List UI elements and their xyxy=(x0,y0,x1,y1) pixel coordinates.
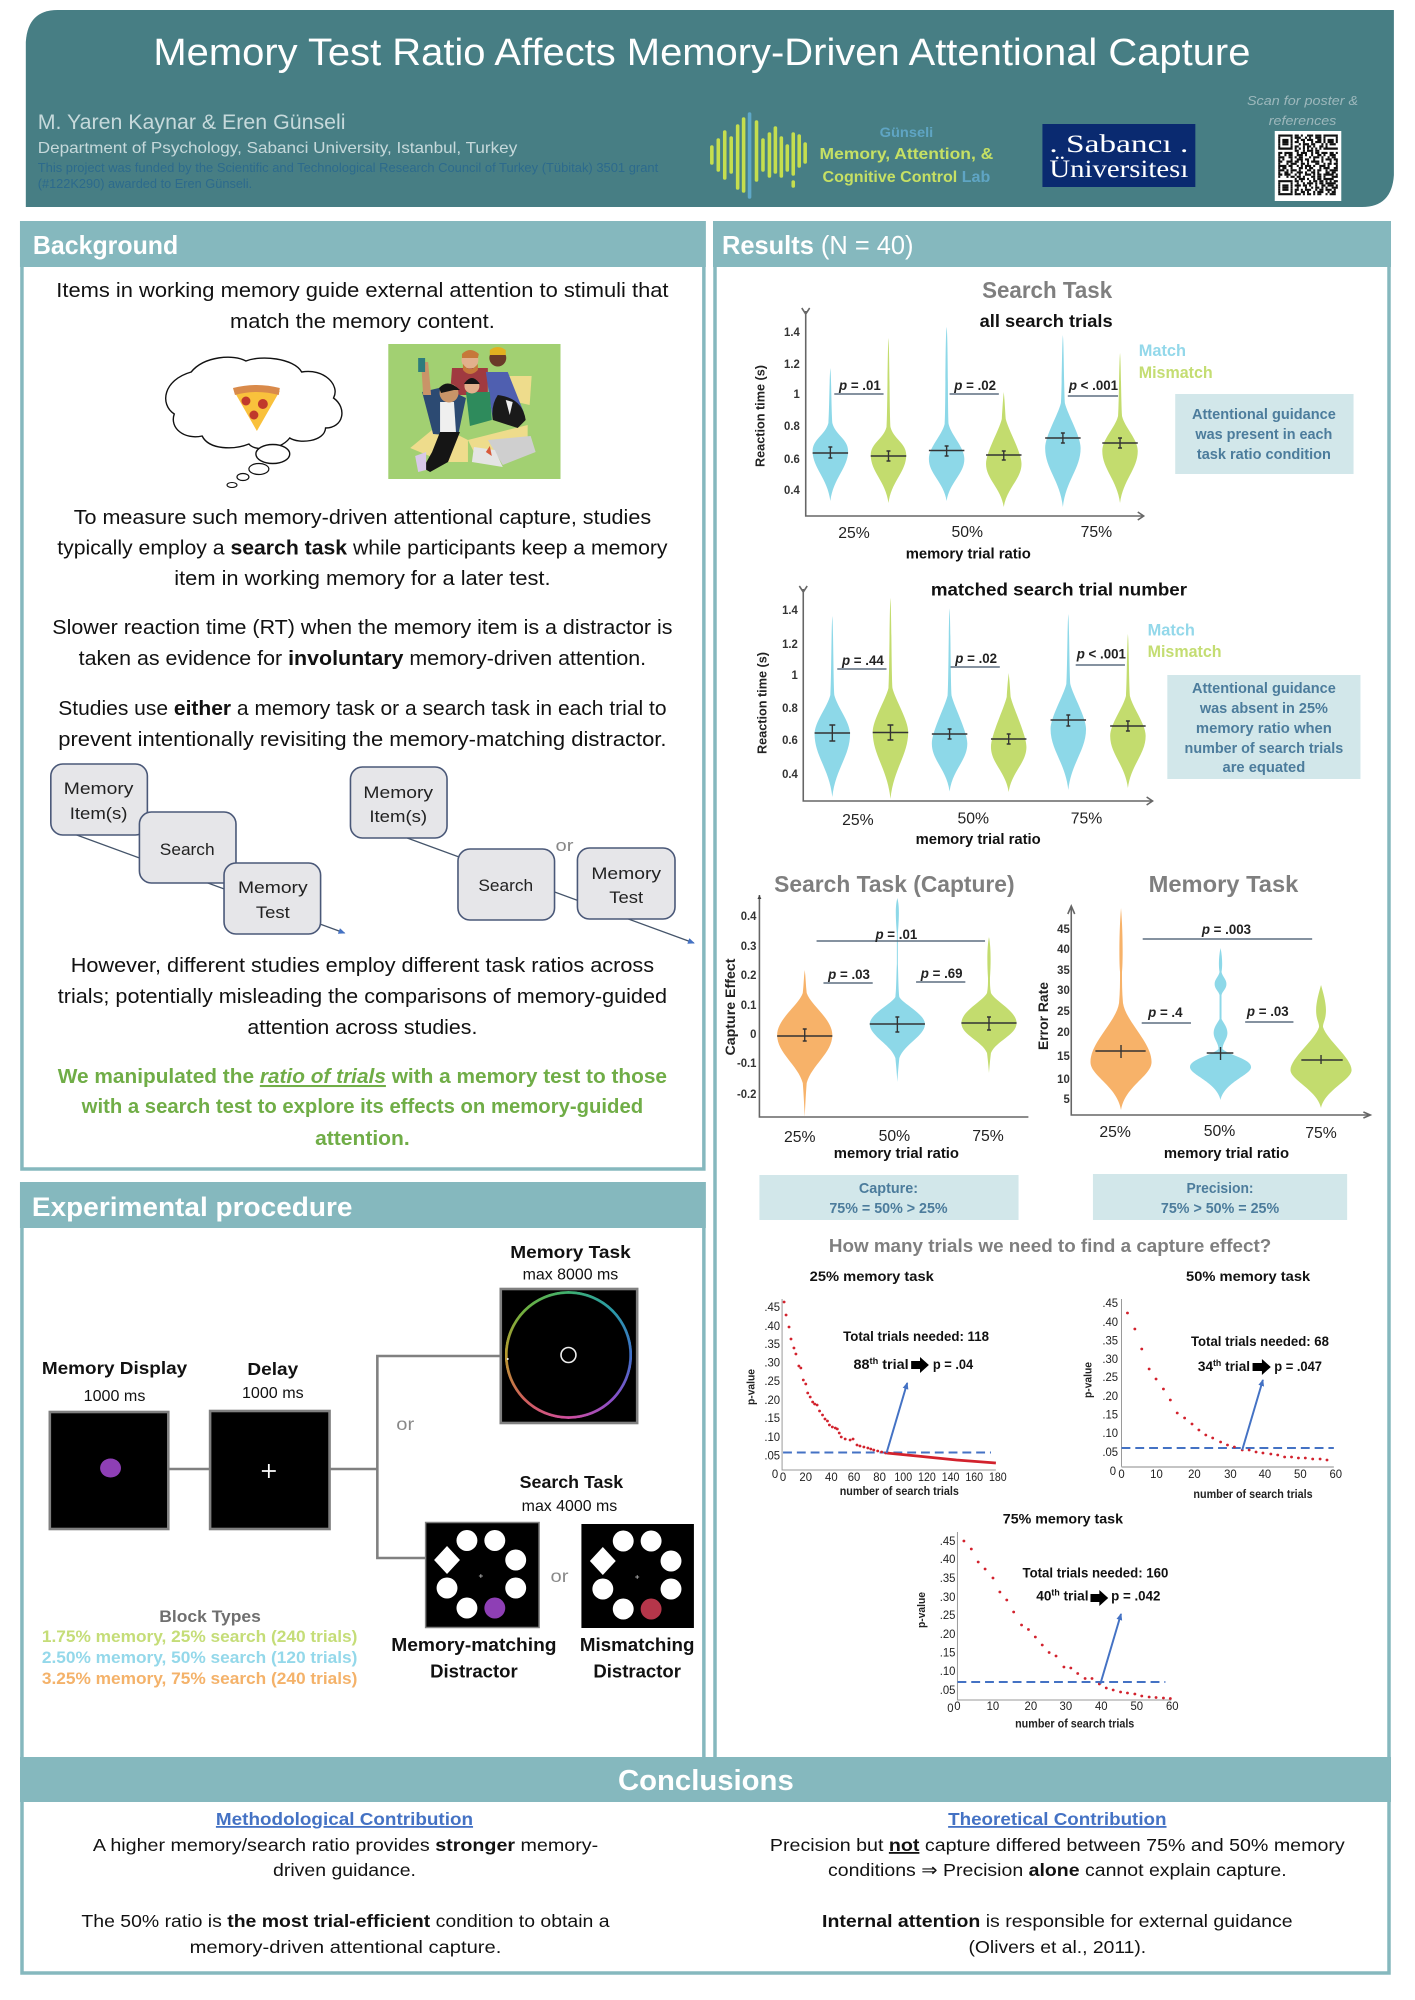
chart: capture effect violin plot: memory trial ratio xyxy=(834,1146,959,1162)
chart: memory error rate violin plot: p = .03 xyxy=(1246,1004,1289,1019)
chart: 25% memory task p-value curve: 60 xyxy=(848,1472,860,1484)
connector lines xyxy=(168,1356,500,1558)
chart: 75% memory task p-value curve: .20 xyxy=(940,1629,955,1641)
chart: capture effect violin plot: -0.1 xyxy=(737,1058,757,1070)
legend: match and mismatch xyxy=(1139,341,1213,382)
chart: 50% memory task p-value curve: 0 xyxy=(1118,1469,1125,1481)
chart: memory error rate violin plot: 15 xyxy=(1057,1051,1070,1063)
callout: guidance present: Attentional guidance xyxy=(1192,407,1336,423)
chart: 50% memory task p-value curve: .15 xyxy=(1102,1409,1118,1422)
diagram: sequential trial flow: Search xyxy=(160,840,215,859)
chart: 75% memory task p-value curve: 60 xyxy=(1166,1701,1179,1713)
chart: 25% memory task p-value curve: 0 xyxy=(780,1472,786,1484)
chart: 25% memory task p-value curve: 100 xyxy=(894,1472,912,1484)
text block: task design: Studies use either a memory task or a search task in each trial to xyxy=(58,697,667,720)
callout: guidance absent xyxy=(1167,675,1360,779)
text block: theoretical contribution: Precision but not capture differed between 75% and 50% memory xyxy=(770,1835,1345,1855)
callout: guidance absent: was absent in 25% xyxy=(1199,701,1328,717)
chart: matched search trial number violin plot: 0.8 xyxy=(782,703,798,715)
legend: match and mismatch: Mismatch xyxy=(1139,363,1213,382)
chart: capture effect violin plot: -0.2 xyxy=(737,1089,756,1101)
diagram: sequential trial flow: Test xyxy=(256,903,290,922)
chart: capture effect violin plot: 25% xyxy=(784,1129,816,1146)
chart: all search trials violin plot: 1.2 xyxy=(784,359,800,371)
chart: 25% memory task p-value curve: .45 xyxy=(764,1302,780,1314)
panel: conclusions xyxy=(20,1757,1391,1973)
text block: methodological contribution: driven guidance. xyxy=(273,1860,416,1880)
chart: 25% memory task p-value curve: .05 xyxy=(764,1450,780,1463)
chart: matched search trial number violin plot: 0.4 xyxy=(782,769,798,781)
callout: precision summary: 75% > 50% = 25% xyxy=(1161,1201,1279,1217)
diagram: either-or trial flow: Memory xyxy=(363,783,434,802)
callout: guidance absent: Attentional guidance xyxy=(1192,681,1336,697)
chart: 25% memory task p-value curve: 20 xyxy=(799,1472,812,1484)
chart: 75% memory task p-value curve: .25 xyxy=(940,1610,955,1622)
text block: task ratios xyxy=(58,954,667,1039)
chart: 25% memory task p-value curve: th xyxy=(870,1356,878,1366)
chart: 50% memory task p-value curve: number of search trials xyxy=(1193,1489,1313,1501)
chart: 25% memory task p-value curve: .40 xyxy=(764,1321,780,1333)
chart: 25% memory task p-value curve: trial xyxy=(878,1356,909,1372)
chart: capture effect violin plot: Search Task (Capture) xyxy=(774,871,1015,897)
text block: task design: prevent intentionally revisiting the memory-matching distractor. xyxy=(58,728,667,751)
chart: memory error rate violin plot: 10 xyxy=(1057,1074,1070,1086)
chart: 25% memory task p-value curve: .20 xyxy=(764,1395,780,1407)
chart: 25% memory task p-value curve: 140 xyxy=(942,1472,959,1484)
chart: 25% memory task p-value curve: 120 xyxy=(918,1472,936,1484)
conclusions content xyxy=(81,1765,1345,1957)
authors: M. Yaren Kaynar & Eren Günseli xyxy=(38,111,345,134)
text block: measurement: item in working memory for a later test. xyxy=(174,567,551,590)
icon: colour wheel xyxy=(505,1291,632,1419)
chart: 75% memory task p-value curve: .15 xyxy=(940,1647,955,1660)
chart: 50% memory task p-value curve: trial xyxy=(1221,1358,1250,1374)
icon: QR code xyxy=(1275,131,1341,201)
chart: memory error rate violin plot: p = .003 xyxy=(1201,922,1251,937)
chart: all search trials violin plot: 1 xyxy=(794,389,800,401)
chart: 25% memory task p-value curve: Total trials needed: 118 xyxy=(843,1328,989,1344)
diagram: either-or trial flow xyxy=(350,767,694,943)
chart: capture effect violin plot: 75% xyxy=(972,1128,1004,1145)
chart: 75% memory task p-value curve: .30 xyxy=(940,1592,955,1604)
text block: theoretical contribution: conditions ⇒ Precision alone cannot explain capture. xyxy=(828,1860,1287,1880)
text block: intro: match the memory content. xyxy=(230,310,495,333)
chart: 25% memory task p-value curve: number of search trials xyxy=(840,1486,959,1498)
chart: 75% memory task p-value curve xyxy=(916,1510,1179,1731)
text block: task ratios: trials; potentially misleading the comparisons of memory-guided xyxy=(58,985,667,1008)
diagram: either-or trial flow: or xyxy=(556,836,574,855)
title: Memory Test Ratio Affects Memory-Driven Attentional Capture xyxy=(153,32,1250,74)
chart: 75% memory task p-value curve: 40 xyxy=(1036,1587,1052,1604)
callout: guidance absent: memory ratio when xyxy=(1196,721,1332,737)
text block: intro: Items in working memory guide external attention to stimuli that xyxy=(56,279,669,302)
chart: 50% memory task p-value curve: .30 xyxy=(1102,1354,1118,1366)
chart: 50% memory task p-value curve: .45 xyxy=(1102,1298,1118,1310)
chart: all search trials violin plot: Reaction time (s) xyxy=(752,365,767,467)
text block: aim of study: with a search test to explore its effects on memory-guided xyxy=(81,1095,643,1118)
chart: matched search trial number violin plot: 1.4 xyxy=(782,605,798,617)
image: picnic illustration xyxy=(388,344,561,479)
chart: matched search trial number violin plot: p = .02 xyxy=(954,651,997,666)
chart: matched search trial number violin plot: 25% xyxy=(842,812,874,829)
chart: 75% memory task p-value curve: p-value xyxy=(916,1592,928,1628)
chart: 50% memory task p-value curve: 0 xyxy=(1110,1466,1116,1478)
chart: 50% memory task p-value curve: .25 xyxy=(1102,1372,1118,1384)
chart: memory error rate violin plot: memory trial ratio xyxy=(1164,1146,1289,1162)
distractor labels: Distractor xyxy=(430,1660,518,1682)
chart: all search trials violin plot xyxy=(752,308,1144,563)
funding note xyxy=(38,161,659,191)
text block: reaction time xyxy=(52,616,673,670)
text block: theoretical contribution: Theoretical Contribution xyxy=(948,1809,1167,1829)
chart: 50% memory task p-value curve: .20 xyxy=(1102,1391,1118,1403)
chart: 25% memory task p-value curve: .15 xyxy=(764,1413,780,1425)
chart: 75% memory task p-value curve: 10 xyxy=(987,1701,999,1713)
chart: memory error rate violin plot: 25 xyxy=(1057,1006,1070,1018)
text block: methodological contribution xyxy=(81,1809,610,1957)
text block: task design xyxy=(58,697,667,751)
diagram: either-or trial flow: Item(s) xyxy=(369,807,427,826)
chart: 75% memory task p-value curve: .35 xyxy=(940,1573,955,1585)
lab name xyxy=(820,125,994,186)
chart: matched search trial number violin plot: memory trial ratio xyxy=(916,832,1041,848)
chart: capture effect violin plot: p = .01 xyxy=(874,927,918,942)
legend: match and mismatch: Match xyxy=(1139,341,1186,360)
chart: 25% memory task p-value curve xyxy=(746,1268,1007,1498)
text block: methodological contribution: memory-driven attentional capture. xyxy=(190,1937,501,1957)
chart: all search trials violin plot: p = .02 xyxy=(953,378,996,393)
chart: 25% memory task p-value curve: 0 xyxy=(772,1469,778,1481)
chart: 75% memory task p-value curve: .10 xyxy=(940,1666,955,1678)
chart: 50% memory task p-value curve: 30 xyxy=(1224,1469,1237,1481)
memory task: Memory Task xyxy=(510,1242,631,1262)
chart: 25% memory task p-value curve: .35 xyxy=(764,1339,780,1351)
chart: memory error rate violin plot xyxy=(1035,871,1370,1162)
chart: 50% memory task p-value curve: .05 xyxy=(1102,1447,1118,1459)
delay: 1000 ms xyxy=(242,1385,304,1402)
chart: matched search trial number violin plot: p = .44 xyxy=(841,653,884,668)
diagram: either-or trial flow: Search xyxy=(478,876,533,895)
chart: all search trials violin plot: all search trials xyxy=(980,311,1113,331)
chart: matched search trial number violin plot: matched search trial number xyxy=(931,579,1187,600)
callout: guidance present: was present in each xyxy=(1194,427,1332,443)
chart: all search trials violin plot: 0.8 xyxy=(784,421,800,433)
chart: 50% memory task p-value curve: 10 xyxy=(1150,1469,1163,1481)
scan note xyxy=(1247,93,1358,128)
chart: all search trials violin plot: 0.6 xyxy=(784,454,800,466)
chart: matched search trial number violin plot: 0.6 xyxy=(782,735,798,747)
chart: 75% memory task p-value curve: trial xyxy=(1060,1587,1089,1604)
scan note: Scan for poster & xyxy=(1247,93,1358,108)
chart: 50% memory task p-value curve xyxy=(1083,1268,1342,1501)
chart: 50% memory task p-value curve: 40 xyxy=(1259,1469,1271,1481)
chart: memory error rate violin plot: Error Rate xyxy=(1035,982,1051,1050)
chart: 75% memory task p-value curve: .45 xyxy=(940,1536,955,1548)
heading: background: Background xyxy=(33,232,178,260)
callout: precision summary: Precision: xyxy=(1187,1181,1254,1197)
chart: matched search trial number violin plot: 1.2 xyxy=(782,639,798,651)
subheading: trials needed question: How many trials we need to find a capture effect? xyxy=(829,1235,1271,1256)
memory display: Memory Display xyxy=(42,1358,187,1378)
or label: or xyxy=(396,1414,414,1434)
lab name: Memory, Attention, & xyxy=(820,146,994,163)
display: memory-matching distractor xyxy=(426,1522,539,1628)
chart: memory error rate violin plot: 45 xyxy=(1057,924,1070,936)
chart: memory error rate violin plot: 5 xyxy=(1063,1094,1070,1106)
chart: 50% memory task p-value curve: p = .047 xyxy=(1274,1358,1322,1374)
chart: all search trials violin plot: memory trial ratio xyxy=(906,546,1031,563)
text block: theoretical contribution: Internal attention is responsible for external guidance xyxy=(822,1911,1293,1931)
chart: matched search trial number violin plot: 1 xyxy=(792,670,798,682)
callout: capture summary: 75% = 50% > 25% xyxy=(829,1201,948,1217)
chart: matched search trial number violin plot: Reaction time (s) xyxy=(754,652,769,754)
chart: capture effect violin plot: 0.1 xyxy=(741,1000,757,1012)
chart: 50% memory task p-value curve: 50% memory task xyxy=(1186,1268,1310,1284)
chart: memory error rate violin plot: Memory Task xyxy=(1149,871,1299,897)
chart: capture effect violin plot: p = .03 xyxy=(827,967,870,982)
chart: 75% memory task p-value curve: Total trials needed: 160 xyxy=(1022,1564,1169,1581)
callout: capture summary: Capture: xyxy=(859,1181,918,1197)
panel: experimental procedure xyxy=(20,1182,706,1760)
block types legend xyxy=(42,1607,357,1688)
text block: theoretical contribution: (Olivers et al., 2011). xyxy=(968,1937,1146,1957)
chart: all search trials violin plot: 50% xyxy=(952,524,983,541)
text block: aim of study xyxy=(58,1065,667,1150)
chart: capture effect violin plot: Capture Effect xyxy=(722,958,738,1056)
text block: methodological contribution: The 50% ratio is the most trial-efficient condition to obtain a xyxy=(81,1911,610,1931)
text block: methodological contribution: Methodological Contribution xyxy=(216,1809,473,1829)
callout: guidance absent: number of search trials xyxy=(1185,741,1343,757)
chart: 50% memory task p-value curve: Total trials needed: 68 xyxy=(1191,1333,1329,1349)
chart: memory error rate violin plot: 40 xyxy=(1057,944,1070,956)
chart: 50% memory task p-value curve: 20 xyxy=(1188,1469,1201,1481)
block types legend: Block Types xyxy=(159,1607,261,1626)
text block: task ratios: attention across studies. xyxy=(247,1016,477,1039)
search task xyxy=(391,1472,694,1682)
chart: 75% memory task p-value curve: p = .042 xyxy=(1111,1587,1161,1604)
chart: 25% memory task p-value curve: p = .04 xyxy=(933,1356,973,1372)
chart: memory error rate violin plot: 35 xyxy=(1057,965,1070,977)
chart: matched search trial number violin plot: 75% xyxy=(1071,810,1102,828)
diagram: either-or trial flow: Memory xyxy=(591,864,662,883)
header banner xyxy=(26,10,1394,207)
search task: max 4000 ms xyxy=(522,1498,618,1515)
chart: capture effect violin plot: 0.3 xyxy=(741,941,756,953)
lab name: Günseli xyxy=(880,125,933,140)
search task: Search Task xyxy=(520,1472,623,1492)
chart: 75% memory task p-value curve: number of search trials xyxy=(1015,1718,1134,1731)
distractor labels: Mismatching xyxy=(580,1634,694,1655)
memory display: 1000 ms xyxy=(84,1388,146,1405)
chart: 50% memory task p-value curve: 60 xyxy=(1330,1469,1342,1481)
text block: methodological contribution: A higher memory/search ratio provides stronger memory- xyxy=(93,1835,598,1855)
chart: all search trials violin plot: 25% xyxy=(838,525,870,542)
panel: results xyxy=(713,221,1391,1760)
chart: 25% memory task p-value curve: 80 xyxy=(873,1472,886,1484)
chart: 50% memory task p-value curve: .10 xyxy=(1102,1428,1118,1440)
chart: 75% memory task p-value curve: 30 xyxy=(1060,1701,1072,1713)
logo: Sabanci University: . Sabancı . xyxy=(1049,131,1188,158)
chart: 25% memory task p-value curve: .25 xyxy=(764,1376,780,1388)
chart: all search trials violin plot: 0.4 xyxy=(784,485,800,497)
chart: capture effect violin plot: 0.2 xyxy=(741,970,756,982)
chart: 50% memory task p-value curve: p-value xyxy=(1083,1362,1094,1398)
chart: capture effect violin plot xyxy=(722,871,1028,1162)
funding note: (#122K290) awarded to Eren Günseli. xyxy=(38,177,252,191)
callout: guidance absent: are equated xyxy=(1223,760,1305,776)
chart: all search trials violin plot: 75% xyxy=(1081,524,1112,541)
chart: 75% memory task p-value curve: 75% memory task xyxy=(1003,1510,1123,1527)
chart: 50% memory task p-value curve: .40 xyxy=(1102,1317,1118,1329)
chart: capture effect violin plot: 0.4 xyxy=(741,911,757,923)
chart: 75% memory task p-value curve: 50 xyxy=(1130,1701,1143,1713)
memory display xyxy=(42,1358,187,1529)
chart: 50% memory task p-value curve: 34 xyxy=(1198,1358,1213,1374)
delay xyxy=(210,1359,330,1529)
chart: 25% memory task p-value curve: 25% memory task xyxy=(810,1268,934,1284)
chart: 75% memory task p-value curve: 0 xyxy=(954,1701,961,1713)
chart: matched search trial number violin plot xyxy=(754,579,1187,848)
delay: Delay xyxy=(247,1359,298,1379)
text block: reaction time: taken as evidence for involuntary memory-driven attention. xyxy=(79,647,646,670)
legend: match and mismatch: Mismatch xyxy=(1148,642,1222,661)
chart: 25% memory task p-value curve: p-value xyxy=(746,1369,757,1405)
chart: memory error rate violin plot: p = .4 xyxy=(1147,1005,1183,1020)
diagram: sequential trial flow: Memory xyxy=(64,779,134,798)
block types legend: 3.25% memory, 75% search (240 trials) xyxy=(42,1669,357,1688)
chart: 50% memory task p-value curve: .35 xyxy=(1102,1335,1118,1348)
text block: measurement: typically employ a search task while participants keep a memory xyxy=(57,536,668,560)
text block: aim of study: We manipulated the ratio of trials with a memory test to those xyxy=(58,1065,667,1088)
text block: theoretical contribution xyxy=(770,1809,1345,1957)
distractor labels xyxy=(391,1634,694,1682)
chart: 50% memory task p-value curve: th xyxy=(1213,1358,1221,1368)
chart: 25% memory task p-value curve: .10 xyxy=(764,1432,780,1444)
text block: intro xyxy=(56,279,669,333)
chart: 25% memory task p-value curve: 88 xyxy=(854,1356,869,1372)
chart: capture effect violin plot: 50% xyxy=(879,1128,910,1145)
chart: 75% memory task p-value curve: .05 xyxy=(940,1685,955,1697)
chart: memory error rate violin plot: 75% xyxy=(1305,1125,1337,1142)
memory task: max 8000 ms xyxy=(523,1266,619,1284)
chart: 75% memory task p-value curve: 0 xyxy=(947,1703,954,1715)
scan note: references xyxy=(1269,113,1337,128)
legend: match and mismatch xyxy=(1148,620,1222,661)
affiliation: Department of Psychology, Sabanci University, Istanbul, Turkey xyxy=(38,140,517,157)
chart: 75% memory task p-value curve: .40 xyxy=(940,1554,955,1566)
heading: results: Results (N = 40) xyxy=(722,230,914,260)
chart: all search trials violin plot: 1.4 xyxy=(784,327,800,339)
display: mismatching distractor xyxy=(581,1524,694,1628)
callout: capture summary xyxy=(759,1175,1019,1220)
block types legend: 1.75% memory, 25% search (240 trials) xyxy=(42,1627,357,1646)
chart: 25% memory task p-value curve: 160 xyxy=(965,1472,983,1484)
chart: 25% memory task p-value curve: .30 xyxy=(764,1357,780,1370)
logo: Sabanci University xyxy=(1042,124,1195,187)
chart: all search trials violin plot: p < .001 xyxy=(1068,378,1119,393)
text block: task ratios: However, different studies employ different task ratios across xyxy=(71,954,654,977)
distractor labels: Distractor xyxy=(593,1660,681,1682)
chart: 75% memory task p-value curve: 40 xyxy=(1095,1701,1108,1713)
chart: memory error rate violin plot: 20 xyxy=(1057,1027,1070,1039)
diagram: sequential trial flow xyxy=(51,764,344,934)
chart: memory error rate violin plot: 30 xyxy=(1057,985,1070,997)
chart: 25% memory task p-value curve: 40 xyxy=(825,1472,838,1484)
chart: capture effect violin plot: 0 xyxy=(750,1029,756,1041)
chart: 25% memory task p-value curve: 180 xyxy=(989,1472,1007,1484)
icon: pizza slice xyxy=(233,385,280,431)
text block: measurement: To measure such memory-driven attentional capture, studies xyxy=(74,506,651,529)
icon: thought bubble with pizza xyxy=(166,357,342,488)
chart: 50% memory task p-value curve: 50 xyxy=(1294,1469,1307,1481)
diagram: sequential trial flow: Item(s) xyxy=(70,804,127,823)
heading: experimental procedure: Experimental procedure xyxy=(32,1192,352,1222)
funding note: This project was funded by the Scientific and Technological Research Council of Turkey (Tübitak) 3501 grant xyxy=(38,161,659,175)
logo: Sabanci University: Üniversitesı xyxy=(1049,156,1188,183)
memory task xyxy=(501,1242,637,1423)
block types legend: 2.50% memory, 50% search (120 trials) xyxy=(42,1648,357,1667)
legend: match and mismatch: Match xyxy=(1148,620,1195,640)
chart: matched search trial number violin plot: p < .001 xyxy=(1076,646,1126,662)
search task: or xyxy=(551,1566,569,1586)
subheading: search task: Search Task xyxy=(982,277,1112,303)
chart: memory error rate violin plot: 50% xyxy=(1204,1123,1235,1140)
chart: 75% memory task p-value curve: th xyxy=(1051,1587,1060,1598)
heading: conclusions: Conclusions xyxy=(618,1765,794,1797)
chart: memory error rate violin plot: 25% xyxy=(1099,1124,1131,1141)
callout: precision summary xyxy=(1093,1174,1347,1220)
chart: matched search trial number violin plot: 50% xyxy=(957,810,989,828)
text block: reaction time: Slower reaction time (RT) when the memory item is a distractor is xyxy=(52,616,673,639)
chart: capture effect violin plot: p = .69 xyxy=(920,966,963,981)
icon: lab waveform logo xyxy=(712,114,805,197)
distractor labels: Memory-matching xyxy=(391,1634,557,1655)
chart: all search trials violin plot: p = .01 xyxy=(838,378,881,393)
text block: measurement xyxy=(57,506,668,590)
diagram: either-or trial flow: Test xyxy=(609,888,643,907)
panel: background xyxy=(20,221,706,1169)
chart: 75% memory task p-value curve: 20 xyxy=(1025,1701,1037,1713)
lab name: Cognitive Control Lab xyxy=(823,169,991,186)
diagram: sequential trial flow: Memory xyxy=(238,878,308,897)
results content xyxy=(722,277,1370,1731)
callout: guidance present xyxy=(1175,394,1354,474)
text block: aim of study: attention. xyxy=(315,1127,410,1150)
callout: guidance present: task ratio condition xyxy=(1197,447,1331,463)
